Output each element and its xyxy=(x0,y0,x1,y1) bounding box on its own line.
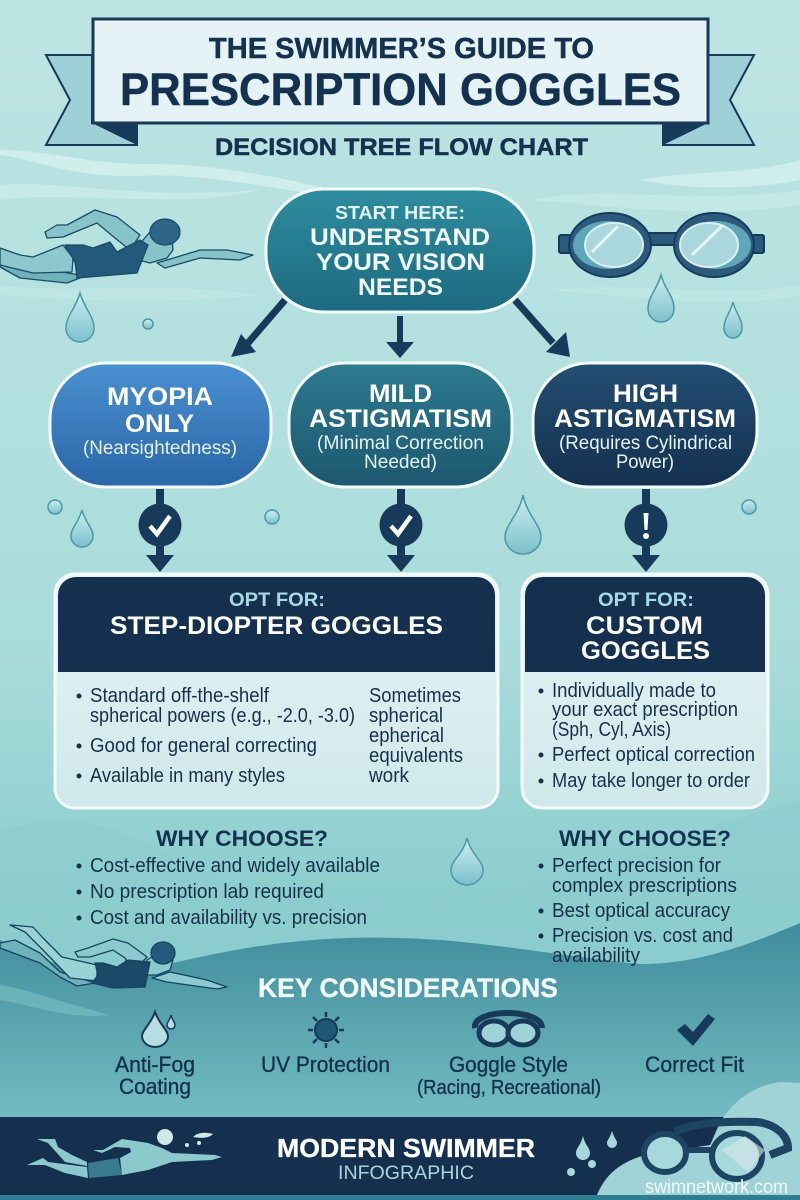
why choose: step-diopter: No prescription lab required xyxy=(90,880,324,903)
start node xyxy=(266,189,534,312)
why choose: custom: Perfect precision for xyxy=(552,854,721,877)
bullet list: spherical powers (e.g., -2.0, -3.0) xyxy=(90,704,355,727)
consideration: anti-fog coating: Coating xyxy=(119,1074,191,1099)
why choose: step-diopter: Cost-effective and widely available xyxy=(90,854,380,877)
why choose: step-diopter: WHY CHOOSE? xyxy=(156,826,328,851)
footer title: MODERN SWIMMER xyxy=(277,1133,535,1163)
illustration: swimmer lower xyxy=(0,925,227,989)
consideration: goggle style xyxy=(417,1013,601,1099)
node: high astigmatism: ASTIGMATISM xyxy=(554,405,736,433)
footer goggles xyxy=(644,1122,788,1179)
side note: work xyxy=(368,764,410,787)
left ribbon xyxy=(46,55,137,145)
connector with check: mild xyxy=(380,489,422,572)
consideration: uv protection: UV Protection xyxy=(261,1052,390,1077)
start node: START HERE: xyxy=(335,203,465,223)
footer band xyxy=(0,1082,800,1200)
node: myopia only: ONLY xyxy=(125,410,194,438)
why choose: custom: Best optical accuracy xyxy=(552,899,731,922)
node: high astigmatism: (Requires Cylindrical xyxy=(559,433,732,454)
node: high astigmatism xyxy=(533,363,757,487)
arrow: start to high xyxy=(515,300,570,357)
node: myopia only xyxy=(50,363,271,487)
heading line one: THE SWIMMER’S GUIDE TO xyxy=(209,33,594,65)
bullet list: Individually made to xyxy=(552,679,716,702)
side note: spherical xyxy=(369,704,443,727)
node: high astigmatism: HIGH xyxy=(613,380,678,408)
connector with alert: high xyxy=(624,489,668,572)
watermark: swimnetwork.com xyxy=(645,1177,788,1198)
start node: NEEDS xyxy=(358,274,443,301)
water drops and bubbles xyxy=(48,275,756,885)
icon: check mark xyxy=(677,1014,715,1046)
side note: equivalents xyxy=(369,744,463,767)
footer drops xyxy=(567,1131,617,1176)
why choose: step-diopter xyxy=(76,826,380,929)
panel: step-diopter goggles: OPT FOR: xyxy=(229,590,325,611)
bullet list: Perfect optical correction xyxy=(552,743,755,766)
heading line two: PRESCRIPTION GOGGLES xyxy=(120,64,681,115)
node: myopia only: (Nearsightedness) xyxy=(83,438,237,459)
title banner xyxy=(46,19,754,145)
footer subtitle: INFOGRAPHIC xyxy=(338,1163,474,1184)
node: high astigmatism: Power) xyxy=(616,452,674,473)
illustration: swimmer top xyxy=(0,210,253,283)
start node: UNDERSTAND xyxy=(310,224,490,251)
bullet list xyxy=(76,684,355,787)
panel: custom goggles: GOGGLES xyxy=(581,637,710,665)
node: mild astigmatism: MILD xyxy=(369,380,432,408)
bullet list: Available in many styles xyxy=(90,764,285,787)
node: mild astigmatism xyxy=(289,363,512,487)
node: mild astigmatism: ASTIGMATISM xyxy=(309,405,492,433)
why choose: custom: Precision vs. cost and xyxy=(552,924,733,947)
bullet list: (Sph, Cyl, Axis) xyxy=(552,718,671,741)
consideration: anti-fog coating xyxy=(115,1012,195,1099)
wave corner xyxy=(597,1082,800,1195)
consideration: anti-fog coating: Anti-Fog xyxy=(115,1052,195,1077)
footer swimmer xyxy=(27,1129,222,1178)
icon: droplet xyxy=(142,1012,168,1047)
panel: custom goggles: OPT FOR: xyxy=(598,590,694,611)
arrow: start to mild xyxy=(386,316,414,358)
why choose: custom: availability xyxy=(552,944,641,967)
node: mild astigmatism: (Minimal Correction xyxy=(317,433,484,454)
consideration: correct fit: Correct Fit xyxy=(645,1052,744,1077)
consideration: goggle style: Goggle Style xyxy=(449,1052,568,1077)
panel: custom goggles xyxy=(522,574,768,808)
why choose: step-diopter: Cost and availability vs. precision xyxy=(90,906,367,929)
consideration: uv protection xyxy=(261,1012,390,1077)
why choose: custom: complex prescriptions xyxy=(552,874,737,897)
consideration: goggle style: (Racing, Recreational) xyxy=(417,1077,601,1099)
bullet list xyxy=(538,679,755,792)
icon: goggles xyxy=(475,1013,542,1045)
arrow: start to myopia xyxy=(231,300,285,357)
side note: Sometimes xyxy=(369,684,461,707)
panel: step-diopter goggles xyxy=(55,574,498,808)
node: mild astigmatism: Needed) xyxy=(364,452,437,473)
banner panel xyxy=(93,19,708,123)
start node: YOUR VISION xyxy=(316,249,485,276)
subtitle: DECISION TREE FLOW CHART xyxy=(215,134,588,161)
bullet list: Good for general correcting xyxy=(90,734,317,757)
consideration: correct fit xyxy=(645,1014,744,1077)
bullet list: May take longer to order xyxy=(552,769,750,792)
why choose: custom xyxy=(538,826,737,967)
bullet list: your exact prescription xyxy=(552,698,738,721)
panel: custom goggles: CUSTOM xyxy=(586,612,703,640)
icon: sun xyxy=(308,1012,344,1048)
node: myopia only: MYOPIA xyxy=(107,383,213,411)
connector with check: myopia xyxy=(138,489,182,572)
illustration: goggles top xyxy=(559,213,764,277)
key considerations heading: KEY CONSIDERATIONS xyxy=(258,973,558,1003)
right ribbon xyxy=(663,55,754,145)
side note: epherical xyxy=(369,724,444,747)
panel: step-diopter goggles: STEP-DIOPTER GOGGLES xyxy=(110,612,443,640)
side note xyxy=(368,684,463,787)
why choose: custom: WHY CHOOSE? xyxy=(559,826,731,851)
bullet list: Standard off-the-shelf xyxy=(90,684,269,707)
